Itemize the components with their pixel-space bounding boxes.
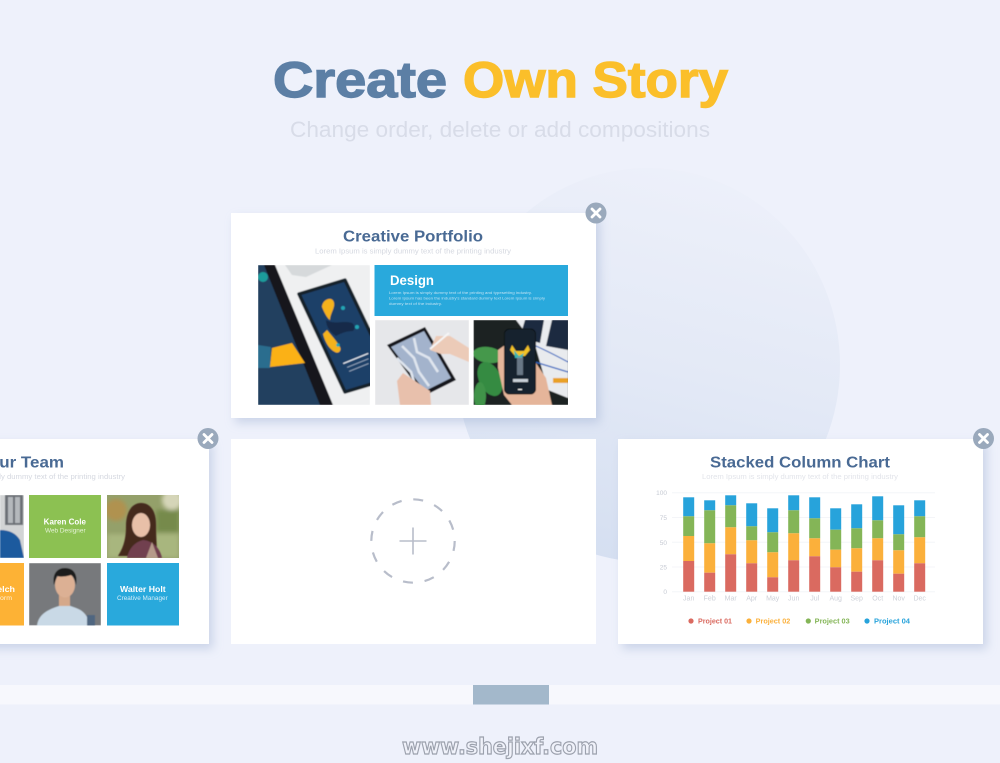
tile: walter holt: Creative Manager — [117, 595, 169, 602]
close button — [973, 428, 994, 449]
bar chart: 100 — [656, 490, 667, 497]
panel: our team — [0, 428, 218, 644]
bar chart: May — [766, 596, 780, 602]
design tile: Lorem Ipsum is simply dummy text of the printing and typesetting industry. — [389, 290, 532, 295]
tile: welch — [0, 563, 24, 626]
heading: stacked column chart: Stacked Column Chart — [710, 455, 890, 472]
bar chart: Aug — [829, 596, 842, 602]
title: Create — [273, 52, 447, 108]
photo: phone on desk — [258, 265, 370, 405]
close button — [586, 202, 606, 224]
chart legend: Project 04 — [874, 618, 910, 625]
title — [273, 52, 728, 108]
bar chart — [656, 490, 935, 602]
photo: smiling man — [29, 563, 101, 626]
bar chart: Sep — [850, 596, 863, 602]
bar chart: Apr — [746, 596, 758, 602]
chart legend — [688, 618, 910, 625]
portfolio subtitle: Lorem Ipsum is simply dummy text of the printing industry — [315, 246, 511, 256]
chart legend: Project 01 — [698, 618, 732, 625]
heading: creative portfolio: Creative Portfolio — [343, 229, 483, 246]
photo: smiling woman — [107, 495, 179, 558]
bar chart: Jun — [788, 596, 799, 602]
photo: phone in hand — [472, 320, 568, 410]
background blob — [456, 168, 840, 562]
design tile: Lorem Ipsum has been the industry's standard dummy text Lorem Ipsum is simply — [389, 296, 545, 300]
bar chart: Feb — [704, 596, 716, 602]
bar chart: Nov — [892, 596, 905, 602]
bar chart: Jul — [810, 596, 820, 602]
design tile: Design — [390, 273, 434, 288]
bar chart: 25 — [660, 564, 667, 572]
photo: tablet drawing — [375, 320, 469, 405]
panel: creative portfolio — [231, 202, 606, 418]
design tile: dummy text of the industry. — [389, 301, 442, 306]
scrollbar track — [0, 685, 1000, 704]
photo: man in blue suit — [0, 495, 24, 558]
panel: stacked column chart — [618, 428, 994, 644]
tile: walter holt — [107, 563, 179, 626]
scrollbar thumb — [473, 685, 549, 704]
chart legend: Project 02 — [756, 618, 790, 625]
tile: walter holt: Walter Holt — [120, 585, 166, 594]
title: Own Story — [463, 52, 728, 108]
bar chart: Jan — [683, 596, 694, 602]
bar chart: Dec — [913, 596, 926, 602]
tile: karen cole — [29, 495, 101, 558]
close button — [198, 428, 218, 449]
tile: karen cole: Web Designer — [45, 528, 86, 535]
chart legend: Project 03 — [815, 618, 850, 625]
bar chart: Oct — [872, 596, 883, 602]
tile: karen cole: Karen Cole — [44, 518, 87, 526]
bar chart: 0 — [663, 589, 667, 596]
panel: add composition — [231, 439, 596, 644]
bar chart: 75 — [660, 515, 667, 522]
subtitle: Change order, delete or add compositions — [290, 117, 710, 142]
bar chart: Mar — [725, 596, 737, 602]
chart subtitle: Lorem Ipsum is simply dummy text of the printing industry — [702, 472, 898, 481]
watermark: www.shejixf.com — [402, 735, 598, 760]
bar chart: 50 — [660, 540, 667, 547]
icon: dashed add circle — [371, 499, 455, 583]
design tile — [374, 265, 568, 316]
